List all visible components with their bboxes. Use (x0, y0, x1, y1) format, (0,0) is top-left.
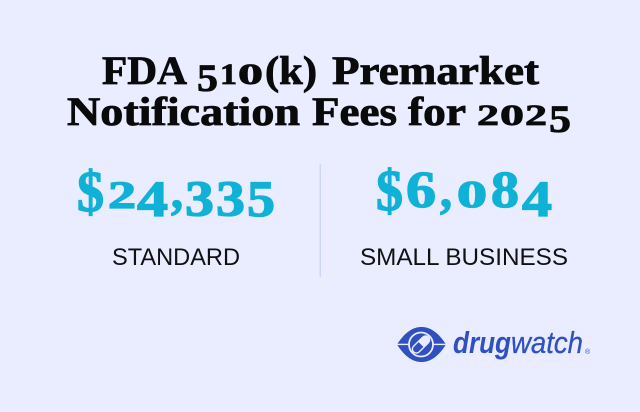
amount: standard fee: , (171, 163, 183, 219)
amount: small business fee: 8 (491, 162, 519, 219)
title: 5 (197, 57, 218, 100)
title: 0 (238, 58, 263, 91)
title: 2 (525, 99, 547, 132)
amount: standard fee: 3 (216, 172, 245, 228)
title: 1 (220, 58, 237, 91)
title: FDA (102, 48, 187, 93)
amount: standard fee: 4 (137, 172, 168, 228)
wordmark: drug (453, 325, 511, 360)
amount: standard fee (77, 159, 275, 228)
title: Notification (67, 89, 300, 134)
amount: small business fee (376, 158, 552, 228)
amount: small business fee: 6 (406, 162, 436, 219)
logo: drugwatch: ® (585, 348, 591, 356)
logo: drugwatch (397, 325, 591, 362)
amount: small business fee: , (440, 162, 452, 218)
title: 2 (477, 99, 499, 132)
amount: standard fee: 2 (108, 174, 136, 217)
title: 5 (549, 98, 571, 141)
title: 0 (500, 99, 524, 132)
logo: drugwatch: watch (511, 325, 583, 360)
title: for (408, 89, 466, 134)
amount: small business fee: 0 (457, 174, 487, 216)
icon: eye with pill (397, 327, 446, 362)
label: standard: STANDARD (112, 244, 240, 271)
amount: small business fee: 4 (522, 172, 552, 228)
label: small business: SMALL BUSINESS (360, 244, 568, 271)
amount: standard fee: 5 (247, 172, 275, 228)
column divider (320, 164, 321, 277)
title: Fees (312, 89, 397, 134)
title: Premarket (332, 48, 540, 93)
amount: standard fee: $ (77, 159, 104, 224)
title (67, 48, 571, 141)
amount: standard fee: 3 (185, 172, 214, 228)
amount: small business fee: $ (376, 158, 403, 223)
title: (k) (265, 48, 317, 93)
